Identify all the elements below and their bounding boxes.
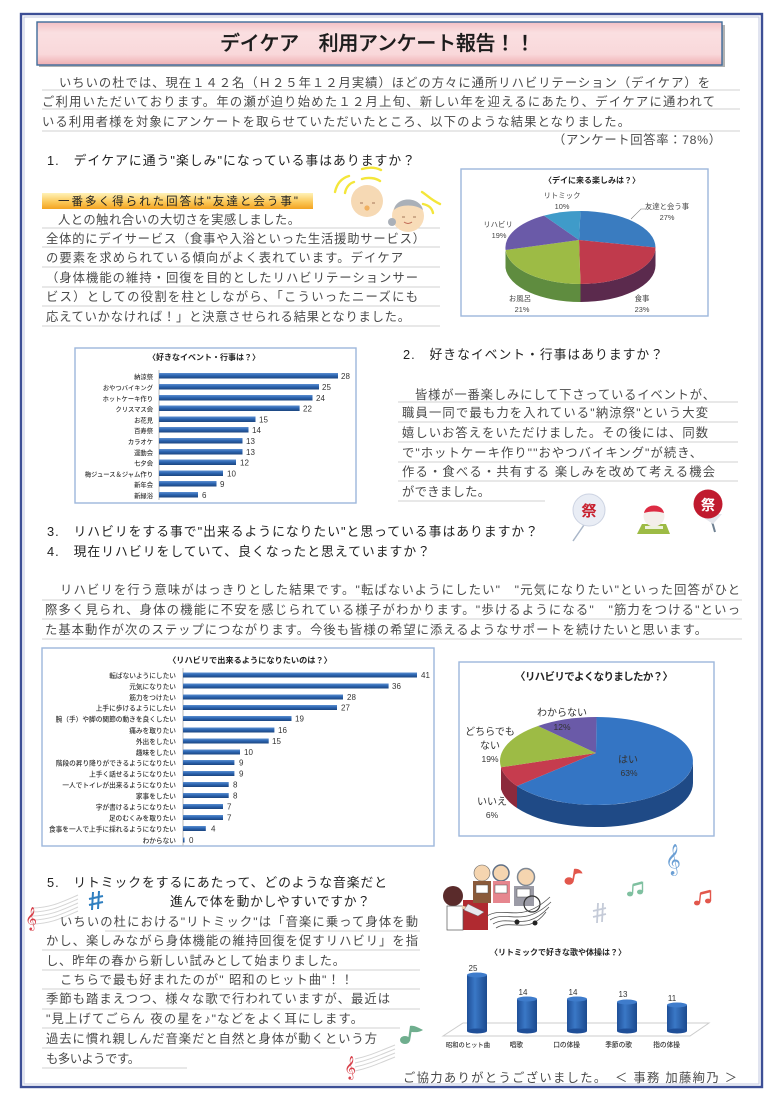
pie labels xyxy=(465,707,638,820)
values: 36 xyxy=(392,682,401,691)
section 5 text: 過去に慣れ親しんだ音楽だと自然と身体が動くという方 xyxy=(46,1031,377,1046)
pie labels: はい xyxy=(618,754,638,766)
category labels: 転ばないようにしたい xyxy=(109,671,176,680)
category labels: 元気になりたい xyxy=(129,682,176,691)
category labels: 納涼祭 xyxy=(134,372,154,381)
intro text xyxy=(42,75,740,147)
category labels: 趣味をしたい xyxy=(136,748,176,757)
highlight: top answer: 一番多く得られた回答は"友達と会う事" xyxy=(58,194,298,208)
pie labels: 6% xyxy=(486,810,499,820)
category labels: 昭和のヒット曲 xyxy=(446,1040,490,1049)
section 5 text: も多いようです。 xyxy=(46,1052,140,1066)
highlight: top answer xyxy=(42,193,313,209)
headings: questions 3 and 4: 3. リハビリをする事で"出来るようになりたい"と思っている事はありますか？ xyxy=(47,524,538,539)
axis xyxy=(182,668,184,846)
pie labels: リハビリ xyxy=(483,220,513,229)
section 5 text xyxy=(42,914,420,1068)
section 1 text xyxy=(42,212,440,326)
pie labels: 友達と会う事 xyxy=(645,202,690,211)
section 1 text: の要素を求められている傾向がよく表れています。デイケア xyxy=(46,250,403,265)
values: 13 xyxy=(246,448,255,457)
category labels: 食事を一人で上手に採れるようになりたい xyxy=(49,824,176,834)
icon: staff with treble clef bottom: 𝄞 xyxy=(344,1057,356,1080)
category labels: 口の体操 xyxy=(553,1040,580,1049)
values: 14 xyxy=(519,988,528,997)
bar chart: what users want to be able to do xyxy=(42,648,434,846)
bars xyxy=(183,672,417,842)
category labels: 痛みを取りたい xyxy=(129,726,176,735)
floor xyxy=(443,1023,709,1036)
heading: question 5: 5. リトミックをするにあたって、どのような音楽だと xyxy=(47,875,387,890)
category labels: 新年会 xyxy=(134,480,154,489)
pie labels: 19% xyxy=(481,754,499,764)
heading: question 2: 2. 好きなイベント・行事はありますか？ xyxy=(403,347,663,362)
category labels: 百寿祭 xyxy=(134,426,154,435)
pie labels: わからない xyxy=(537,707,587,719)
values: 4 xyxy=(211,824,216,834)
icon: white festival fan: 祭 xyxy=(581,503,597,520)
values: 13 xyxy=(619,990,628,999)
chart title: 〈リハビリでよくなりましたか？〉 xyxy=(515,670,673,683)
category labels: 七夕会 xyxy=(134,458,154,468)
section 1 text: （身体機能の維持・回復を目的としたリハビリテーションサー xyxy=(46,270,418,285)
section 1 text: 応えていかなければ！」と決意させられる結果となりました。 xyxy=(46,310,410,324)
headings: questions 3 and 4: 4. 現在リハビリをしていて、良くなったと思えていますか？ xyxy=(47,544,430,559)
category labels: 指の体操 xyxy=(653,1040,680,1049)
section 5 text: し、昨年の春から新しい試みとして始まりました。 xyxy=(46,954,345,968)
pie labels: ない xyxy=(480,740,500,752)
values: 25 xyxy=(322,383,331,392)
category labels xyxy=(85,372,154,500)
section 3-4 text: た基本動作が次のステップにつながります。今後も皆様の希望に添えるようなサポートを続けたいと思います。 xyxy=(45,622,707,637)
icon: smiling elderly faces xyxy=(335,168,440,232)
category labels: 運動会 xyxy=(134,448,154,457)
chart title: 〈好きなイベント・行事は？〉 xyxy=(148,352,260,362)
values xyxy=(202,372,350,500)
values: 9 xyxy=(239,758,244,768)
section 2 text: 職員一同で最も力を入れている"納涼祭"という大変 xyxy=(402,405,708,420)
icon: green note xyxy=(400,1026,423,1044)
icon: red note xyxy=(564,869,582,885)
values: 9 xyxy=(220,480,225,489)
icon: red festival fan xyxy=(694,490,722,532)
icon: red festival fan: 祭 xyxy=(701,497,715,513)
category labels xyxy=(446,1040,680,1049)
headings: questions 3 and 4 xyxy=(47,524,538,559)
pie slices xyxy=(500,717,693,827)
singer 3 in wheelchair xyxy=(514,868,540,912)
values: 8 xyxy=(233,792,238,800)
values: 11 xyxy=(668,994,677,1003)
section 2 text xyxy=(398,387,738,501)
footer credit: ご協力ありがとうございました。 ＜ 事務 加藤絢乃 ＞ xyxy=(403,1070,737,1085)
icon: white festival fan xyxy=(573,494,605,541)
category labels: 季節の歌 xyxy=(605,1040,632,1049)
category labels: 足のむくみを取りたい xyxy=(109,814,176,822)
pie labels: リトミック xyxy=(544,191,580,200)
pianist xyxy=(443,886,484,930)
values: 10 xyxy=(227,470,236,478)
values: 7 xyxy=(227,802,232,812)
bar chart: favourite events xyxy=(75,348,356,503)
values: 12 xyxy=(240,458,249,468)
values: 6 xyxy=(202,491,207,500)
icon: staff with treble clef bottom xyxy=(344,1045,395,1080)
category labels: 腕（手）や脚の関節の動きを良くしたい xyxy=(56,714,176,724)
pie labels: お風呂 xyxy=(509,294,531,303)
category labels: カラオケ xyxy=(128,438,153,446)
category labels: 梅ジュース＆ジャム作り xyxy=(85,470,153,478)
category labels xyxy=(49,671,176,845)
chart title: 〈リトミックで好きな歌や体操は？〉 xyxy=(490,947,626,957)
axis xyxy=(158,370,160,500)
values xyxy=(189,671,430,845)
pie labels: 21% xyxy=(515,305,530,314)
pie labels: 12% xyxy=(553,722,571,732)
section 3-4 text xyxy=(42,582,742,639)
values: 27 xyxy=(341,704,350,712)
pie labels: 10% xyxy=(555,202,570,211)
category labels: 家事をしたい xyxy=(136,792,176,800)
intro text: ご利用いただいております。年の瀬が迫り始めた１２月上旬、新しい年を迎えるにあたり、デイケアに通われて xyxy=(42,94,715,109)
pie labels: 23% xyxy=(635,305,650,314)
icon: staff with treble clef top: 𝄞 xyxy=(25,908,37,931)
title banner xyxy=(37,22,725,67)
values: 14 xyxy=(252,426,261,435)
category labels: 筋力をつけたい xyxy=(129,693,176,702)
icon: red double note xyxy=(694,891,711,905)
category labels: 新緑浴 xyxy=(134,491,154,500)
section 1 text: 人との触れ合いの大切さを実感しました。 xyxy=(58,212,300,227)
section 1 text: 全体的にデイサービス（食事や入浴といった生活援助サービス） xyxy=(46,231,425,246)
section 5 text: こちらで最も好まれたのが" 昭和のヒット曲"！！ xyxy=(60,972,353,987)
singer 1 xyxy=(473,865,491,903)
category labels: 字が書けるようになりたい xyxy=(96,802,176,812)
values: 15 xyxy=(272,737,281,746)
category labels: お花見 xyxy=(134,416,154,424)
pie labels: 19% xyxy=(492,231,507,240)
section 5 text: かし、楽しみながら身体機能の維持回復を促すリハビリ」を指 xyxy=(46,933,418,948)
section 5 text: いちいの杜における"リトミック"は「音楽に乗って身体を動 xyxy=(60,914,418,929)
category labels: 外出をしたい xyxy=(136,737,176,746)
pie labels: 食事 xyxy=(635,294,650,303)
category labels: クリスマス会 xyxy=(115,404,154,414)
section 2 text: 皆様が一番楽しみにして下さっているイベントが、 xyxy=(415,387,715,402)
category labels: 唱歌 xyxy=(510,1040,523,1049)
category labels: ホットケーキ作り xyxy=(103,394,153,403)
icon: staff with treble clef top xyxy=(25,895,78,931)
values: 8 xyxy=(233,780,238,790)
pie labels: いいえ xyxy=(477,796,507,808)
section 5 text: "見上げてごらん 夜の星を♪"などをよく耳にします。 xyxy=(46,1011,363,1026)
values: 28 xyxy=(347,693,356,702)
icon: grey sharp xyxy=(593,903,606,923)
category labels: 階段の昇り降りができるようになりたい xyxy=(56,758,176,768)
category labels: 上手に歩けるようにしたい xyxy=(96,704,176,712)
chart title: 〈デイに来る楽しみは？〉 xyxy=(544,175,640,185)
bars xyxy=(159,373,338,498)
section 3-4 text: リハビリを行う意味がはっきりとした結果です。"転ばないようにしたい" "元気になりたい"といった回答がひと xyxy=(60,582,740,597)
section 2 text: で"ホットケーキ作り""おやつバイキング"が続き、 xyxy=(402,445,702,460)
values: 9 xyxy=(239,770,244,778)
values: 10 xyxy=(244,748,253,757)
values: 19 xyxy=(295,714,304,724)
values: 28 xyxy=(341,372,350,381)
values: 14 xyxy=(569,988,578,997)
heading: question 1: 1. デイケアに通う"楽しみ"になっている事はありますか？ xyxy=(47,153,415,168)
icon: blue treble clef: 𝄞 xyxy=(665,843,681,876)
cylinders xyxy=(467,972,687,1034)
values: 7 xyxy=(227,814,232,822)
category labels: 上手く話せるようになりたい xyxy=(89,770,176,778)
icon: shaved ice xyxy=(637,506,670,534)
values: 22 xyxy=(303,404,312,414)
pie chart: did rehab help xyxy=(459,662,714,836)
heading: question 5 xyxy=(47,875,387,909)
illustration: choir with piano xyxy=(443,865,551,930)
intro text: いちいの杜では、現在１４２名（Ｈ２５年１２月実績）ほどの方々に通所リハビリテーション（デイケア）を xyxy=(59,75,710,90)
section 3-4 text: 際多く見られ、身体の機能に不安を感じられている様子がわかります。"歩けるようになる" "筋力をつける"といっ xyxy=(45,602,740,617)
intro text: （アンケート回答率：78%） xyxy=(553,132,721,147)
category labels: 一人でトイレが出来るようになりたい xyxy=(62,780,176,790)
cylinder chart: favourite songs and exercises xyxy=(443,947,709,1049)
values: 41 xyxy=(421,671,430,680)
pie labels: どちらでも xyxy=(465,726,515,738)
pie labels: 27% xyxy=(660,213,675,222)
section 5 text: 季節も踏まえつつ、様々な歌で行われていますが、最近は xyxy=(46,991,390,1006)
category labels: わからない xyxy=(143,837,176,845)
values: 25 xyxy=(469,964,478,973)
pie labels: 63% xyxy=(620,768,638,778)
values: 15 xyxy=(259,416,268,424)
values xyxy=(469,964,677,1003)
values: 16 xyxy=(278,726,287,735)
wavy staff xyxy=(487,897,551,928)
chart title: 〈リハビリで出来るようになりたいのは？〉 xyxy=(168,655,332,665)
icon: green double note xyxy=(627,882,643,896)
section 1 text: ビス）としての役割を柱としながら、「こういったニーズにも xyxy=(46,289,418,304)
title banner: デイケア 利用アンケート報告！！ xyxy=(220,31,535,55)
singer 2 xyxy=(493,865,510,903)
intro text: いる利用者様を対象にアンケートを取らせていただいたところ、以下のような結果となりました。 xyxy=(42,114,630,129)
pie chart: day-care enjoyments xyxy=(461,169,708,316)
icon: blue sharp xyxy=(89,891,103,910)
section 2 text: 嬉しいお答えをいただけました。その後には、同数 xyxy=(402,425,708,440)
values: 0 xyxy=(189,836,194,845)
heading: question 5: 進んで体を動かしやすいですか？ xyxy=(170,894,370,909)
values: 24 xyxy=(316,394,325,403)
piano xyxy=(463,900,488,930)
pie labels xyxy=(483,191,690,314)
values: 13 xyxy=(246,437,255,446)
pie slices xyxy=(505,211,656,302)
section 2 text: 作る・食べる・共有する 楽しみを改めて考える機会 xyxy=(402,464,715,479)
section 2 text: ができました。 xyxy=(402,484,490,499)
category labels: おやつバイキング xyxy=(103,383,154,392)
